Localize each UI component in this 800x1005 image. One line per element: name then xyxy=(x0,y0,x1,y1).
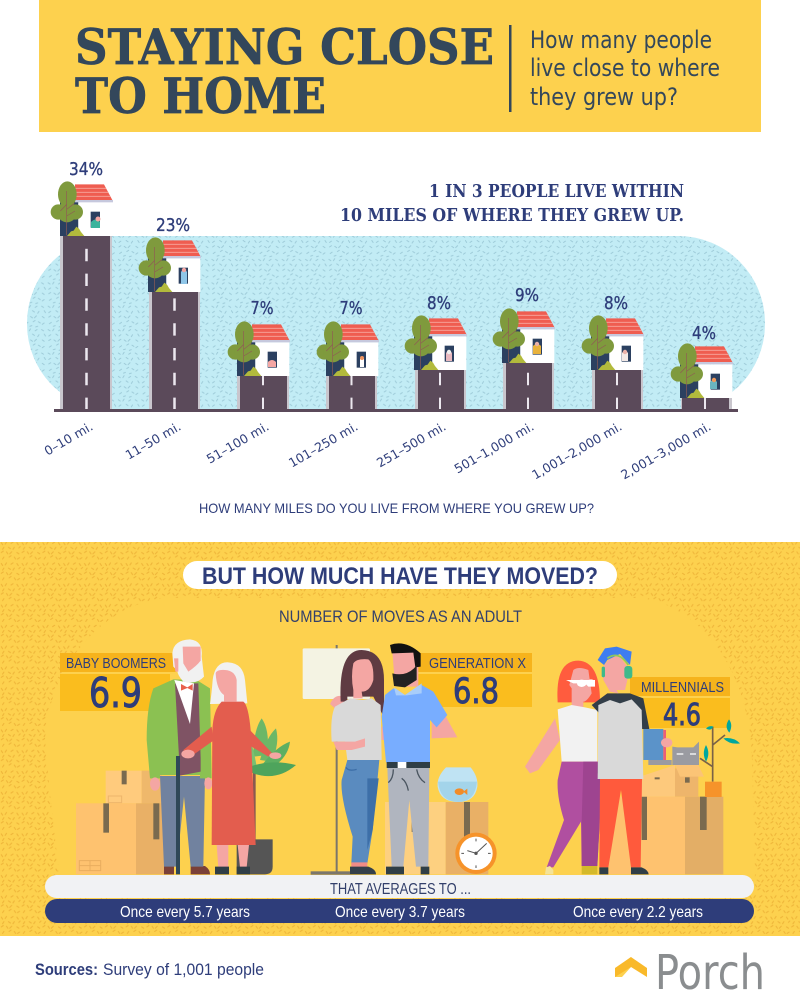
woman xyxy=(330,650,384,874)
plant xyxy=(700,719,740,797)
axis labels: 251–500 mi. xyxy=(374,419,448,470)
subtitle: they grew up? xyxy=(530,83,678,111)
bar: 501–1,000 mi xyxy=(493,285,555,410)
axis labels: 2,001–3,000 mi. xyxy=(618,419,714,482)
logo: Porch xyxy=(615,945,765,1001)
title: STAYING CLOSE xyxy=(75,18,494,76)
bar: 251–500 mi: 8% xyxy=(427,293,451,314)
subtitle: How many people xyxy=(530,26,712,54)
man xyxy=(592,647,649,874)
summary: frequency bar: Once every 3.7 years xyxy=(335,904,465,921)
cat xyxy=(648,742,699,765)
patterned blue backdrop xyxy=(27,236,765,411)
woman xyxy=(525,661,600,874)
subtitle xyxy=(530,26,720,111)
bar: 251–500 mi xyxy=(405,293,467,410)
bar: 11–50 mi: 23% xyxy=(156,215,190,236)
axis title: HOW MANY MILES DO YOU LIVE FROM WHERE YOU GREW UP? xyxy=(199,500,594,516)
axis line xyxy=(54,409,738,412)
summary: frequency bar: Once every 2.2 years xyxy=(573,904,703,921)
plant xyxy=(237,718,296,874)
sources: Sources: xyxy=(35,960,98,979)
label: baby boomers xyxy=(60,653,176,717)
axis labels: 501–1,000 mi. xyxy=(451,419,536,476)
label: generation x: GENERATION X xyxy=(429,655,526,672)
label: generation x xyxy=(418,653,532,712)
summary: that averages to: THAT AVERAGES TO ... xyxy=(330,881,471,898)
title: TO HOME xyxy=(75,67,326,125)
axis labels: 51–100 mi. xyxy=(204,419,272,466)
callout: 1 in 3: 1 IN 3 PEOPLE LIVE WITHIN xyxy=(429,181,684,202)
bar: 0–10 mi xyxy=(51,159,113,410)
bar: 2,001–3,000 mi xyxy=(671,323,733,410)
axis labels: 1,001–2,000 mi. xyxy=(529,419,624,482)
illustration: millennials couple with boxes, cat and plant xyxy=(525,647,740,874)
label: generation x: 6.8 xyxy=(453,672,499,712)
boxes xyxy=(76,771,164,874)
axis labels xyxy=(41,419,713,482)
sources: Survey of 1,001 people xyxy=(103,960,264,979)
section heading pill: BUT HOW MUCH HAVE THEY MOVED? xyxy=(202,563,598,590)
label: baby boomers: 6.9 xyxy=(89,669,142,717)
illustration: baby boomers couple with boxes and plant xyxy=(76,639,296,874)
summary: that averages to xyxy=(45,875,754,898)
callout: 1 in 3: 10 MILES OF WHERE THEY GREW UP. xyxy=(340,205,684,226)
title xyxy=(75,18,494,125)
book xyxy=(643,729,672,760)
bar chart: miles from childhood home xyxy=(51,159,738,412)
man xyxy=(147,639,212,874)
sources xyxy=(35,960,264,979)
lower panel: moves xyxy=(0,542,800,936)
label: millennials xyxy=(630,677,730,733)
lamp xyxy=(303,645,370,875)
bar: 1,001–2,000 mi: 8% xyxy=(604,293,628,314)
illustration: generation x couple with lamp, fishbowl and clock xyxy=(303,643,497,875)
bar: 1,001–2,000 mi xyxy=(582,293,644,410)
logo: Porch: Porch xyxy=(655,945,765,1001)
label: baby boomers: BABY BOOMERS xyxy=(66,655,166,672)
bar: 11–50 mi xyxy=(139,215,201,410)
callout: 1 in 3 xyxy=(340,181,684,226)
bar: 0–10 mi: 34% xyxy=(69,159,103,180)
bar: 51–100 mi: 7% xyxy=(250,298,274,319)
summary: frequency bar: Once every 5.7 years xyxy=(120,904,250,921)
axis labels: 11–50 mi. xyxy=(123,419,184,462)
man xyxy=(382,643,457,874)
bar: 101–250 mi xyxy=(317,298,379,410)
bar: 2,001–3,000 mi: 4% xyxy=(692,323,716,344)
box xyxy=(385,802,488,874)
clock xyxy=(455,833,497,874)
boxes xyxy=(608,765,723,874)
bar: 501–1,000 mi: 9% xyxy=(515,285,539,306)
sub heading: NUMBER OF MOVES AS AN ADULT xyxy=(279,607,522,626)
bar: 101–250 mi: 7% xyxy=(340,298,362,319)
subtitle: live close to where xyxy=(530,54,720,82)
label: millennials: MILLENNIALS xyxy=(641,679,724,696)
label: millennials: 4.6 xyxy=(663,698,701,733)
summary: frequency bar xyxy=(45,899,754,923)
woman xyxy=(181,662,281,874)
fishbowl xyxy=(438,767,477,802)
axis labels: 101–250 mi. xyxy=(286,419,360,470)
axis labels: 0–10 mi. xyxy=(41,419,96,458)
header banner xyxy=(39,0,761,132)
bar: 51–100 mi xyxy=(228,298,290,410)
